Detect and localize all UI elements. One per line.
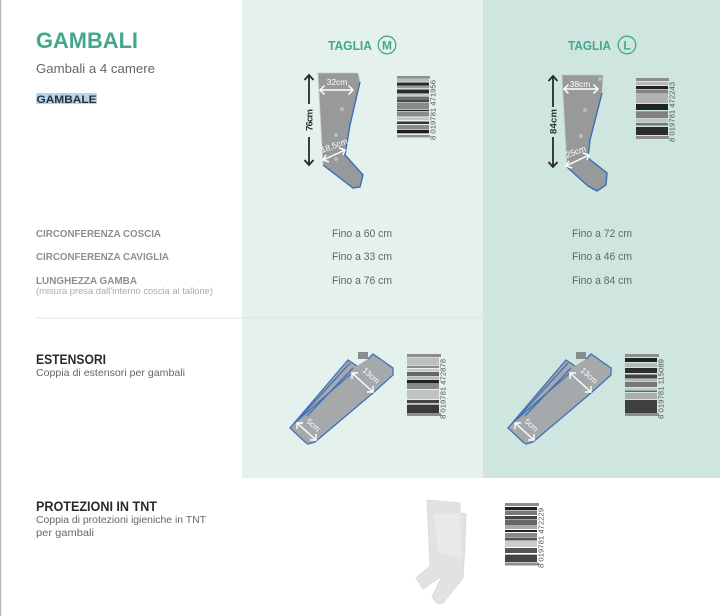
heading: protezioni in TNT: PROTEZIONI IN TNT xyxy=(36,499,158,514)
barcode M: 8 019781 471956 xyxy=(428,80,438,140)
extensors size L: 13cm xyxy=(579,366,599,386)
subtitle: Gambali a 4 camere xyxy=(36,61,155,76)
leg sleeve size M: 18,5cm xyxy=(319,136,349,155)
extensors size M xyxy=(290,352,393,444)
heading: taglia L: L xyxy=(623,38,631,52)
title: GAMBALI xyxy=(36,28,138,53)
heading: estensori: ESTENSORI xyxy=(36,352,106,367)
specification values size M: Fino a 33 cm xyxy=(332,251,392,263)
specification labels: LUNGHEZZA GAMBA xyxy=(36,275,137,287)
barcode extensors L: 8 019781 115089 xyxy=(656,359,666,419)
leg sleeve size L: 25cm xyxy=(564,143,587,160)
barcode extensors L xyxy=(625,354,666,419)
leg sleeve size L: 84cm xyxy=(548,109,560,134)
specification labels: CIRCONFERENZA COSCIA xyxy=(36,228,161,240)
leg sleeve size M xyxy=(304,73,363,188)
specification values size L xyxy=(572,228,632,287)
barcode TNT xyxy=(505,503,546,568)
specification values size L: Fino a 84 cm xyxy=(572,275,632,287)
heading: estensori: Coppia di estensori per gambali xyxy=(36,367,185,379)
heading: gambale: GAMBALE xyxy=(36,94,96,106)
heading: taglia M: M xyxy=(382,38,392,52)
heading: protezioni in TNT: Coppia di protezioni igieniche in TNT xyxy=(36,514,207,526)
extensors size M: 5cm xyxy=(305,417,322,434)
specification values size M: Fino a 60 cm xyxy=(332,228,392,240)
heading: taglia M: TAGLIA xyxy=(328,38,373,53)
extensors size L: 5cm xyxy=(523,417,540,434)
leg sleeve size M: 76cm xyxy=(304,109,316,131)
heading: taglia M xyxy=(328,36,396,54)
specification values size M xyxy=(332,228,392,287)
heading: protezioni in TNT xyxy=(36,499,207,539)
barcode M xyxy=(397,76,438,140)
heading: taglia L: TAGLIA xyxy=(568,38,612,53)
extensors size M: 13cm xyxy=(361,366,381,386)
extensors size L xyxy=(508,352,611,444)
heading: taglia L xyxy=(568,36,636,54)
barcode L xyxy=(636,78,676,142)
barcode L: 8 019781 472243 xyxy=(668,82,676,142)
barcode extensors M: 8 019781 472878 xyxy=(438,359,448,419)
barcode extensors M xyxy=(407,354,448,419)
panel: taglia M xyxy=(242,0,483,478)
heading: protezioni in TNT: per gambali xyxy=(36,527,94,539)
barcode TNT: 8 019781 472229 xyxy=(536,508,546,568)
specification values size M: Fino a 76 cm xyxy=(332,275,392,287)
specification labels: (misura presa dall'interno coscia al tallone) xyxy=(36,286,213,296)
specification values size L: Fino a 72 cm xyxy=(572,228,632,240)
leg sleeve size L: 38cm xyxy=(570,79,590,89)
heading: estensori xyxy=(36,352,185,379)
TNT protective covers xyxy=(416,500,466,604)
specification values size L: Fino a 46 cm xyxy=(572,251,632,263)
panel: taglia L xyxy=(483,0,720,478)
leg sleeve size L xyxy=(548,75,607,191)
specification labels xyxy=(36,228,213,296)
specification labels: CIRCONFERENZA CAVIGLIA xyxy=(36,251,169,263)
leg sleeve size M: 32cm xyxy=(327,77,347,87)
